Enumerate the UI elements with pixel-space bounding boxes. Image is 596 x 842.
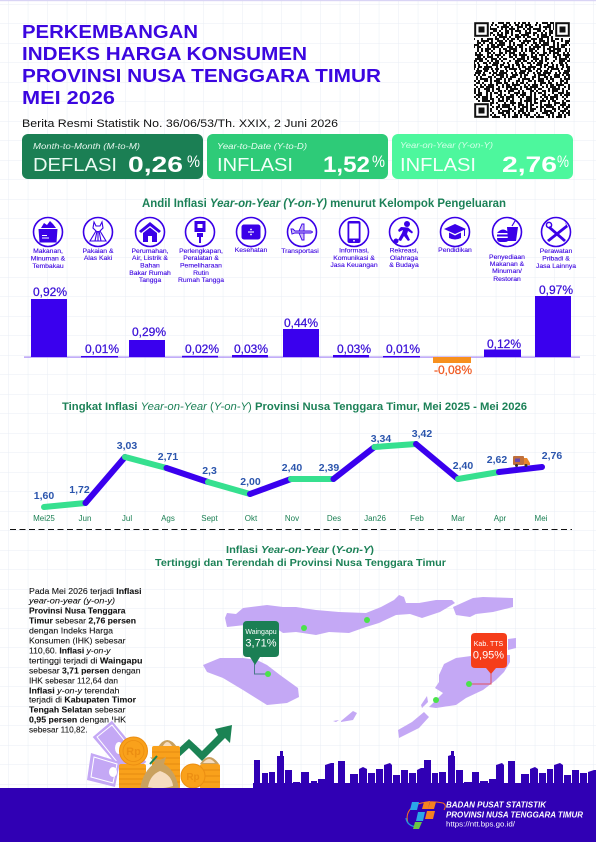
- category labels: Bakar Rumah: [129, 270, 171, 277]
- category labels: Penyediaan: [489, 254, 525, 261]
- card: month-to-month deflation: %: [187, 152, 200, 171]
- icon: education: [440, 218, 470, 246]
- text block: summary: 0,95 persen dengan IHK: [29, 714, 126, 724]
- card: year-on-year inflation: INFLASI: [400, 154, 476, 175]
- card: year-to-date inflation: 1,52: [323, 152, 370, 177]
- bar values: 0,03%: [234, 342, 268, 356]
- category labels: Minuman &: [31, 255, 66, 262]
- text block: summary: tertinggi terjadi di Waingapu: [29, 656, 142, 666]
- callout: Kab. TTS lowest: [469, 633, 507, 684]
- illustration: money, coins and rising arrow: [87, 720, 232, 789]
- bar values: 0,01%: [386, 342, 420, 356]
- line values: 2,76: [542, 450, 562, 462]
- category labels: [31, 247, 576, 284]
- month axis labels: Nov: [285, 514, 299, 523]
- month axis labels: Mei25: [33, 514, 55, 523]
- category labels: Perlengkapan,: [179, 248, 223, 255]
- month axis labels: Jan26: [364, 514, 386, 523]
- line values: 3,42: [412, 428, 432, 440]
- card: year-to-date inflation: Year-to-Date (Y-to-D): [217, 142, 307, 151]
- footer text: agency name: PROVINSI NUSA TENGGARA TIMUR: [446, 810, 583, 820]
- heading: contribution chart: Andil Inflasi Year-on-Year (Y-on-Y) menurut Kelompok Pengeluaran: [142, 196, 506, 210]
- category labels: Komunikasi &: [333, 255, 375, 262]
- category labels: Transportasi: [281, 248, 319, 255]
- line values: 2,00: [240, 476, 261, 488]
- bar values: 0,44%: [284, 316, 318, 330]
- text block: summary: dengan Indeks Harga: [29, 626, 113, 636]
- card: year-on-year inflation: [392, 134, 573, 179]
- month axis labels: [33, 514, 548, 523]
- icon: food service: [492, 218, 522, 246]
- line values: 2,62: [487, 454, 507, 466]
- callout: Waingapu highest: 3,71%: [245, 638, 277, 650]
- text block: summary: Timur sebesar 2,76 persen: [29, 616, 136, 626]
- text block: summary: Konsumen (IHK) sebesar: [29, 636, 126, 646]
- category labels: Air, Listrik &: [132, 255, 168, 262]
- icon: housing: [136, 218, 164, 246]
- card: year-on-year inflation: 2,76: [502, 152, 557, 177]
- card: year-to-date inflation: [207, 134, 388, 179]
- category labels: Jasa Keuangan: [330, 262, 378, 269]
- icon: recreation: [390, 218, 418, 246]
- category labels: Olahraga: [390, 255, 418, 262]
- line values: 2,40: [282, 462, 302, 474]
- icon: household equipment: [186, 218, 214, 246]
- category labels: Kesehatan: [235, 247, 267, 254]
- QR code: [474, 22, 570, 118]
- illustration: money, coins and rising arrow: Rp: [126, 746, 141, 758]
- category labels: Alas Kaki: [84, 255, 113, 262]
- category labels: Pemeliharaan: [180, 262, 222, 270]
- footer text: agency name: https://ntt.bps.go.id/: [446, 820, 516, 828]
- category labels: Makanan &: [490, 261, 525, 268]
- month axis labels: Sept: [201, 514, 218, 523]
- category labels: Peralatan &: [183, 255, 219, 262]
- line values: 1,72: [69, 484, 90, 496]
- icon: health: [236, 218, 266, 246]
- card: month-to-month deflation: DEFLASI: [33, 154, 117, 175]
- category labels: Jasa Lainnya: [536, 263, 576, 270]
- month axis labels: Feb: [410, 514, 424, 523]
- text block: summary: Provinsi Nusa Tenggara: [29, 606, 126, 616]
- bar values: 0,29%: [132, 325, 166, 339]
- month axis labels: Ags: [161, 514, 175, 523]
- category labels: Tangga: [139, 277, 161, 284]
- month axis labels: Apr: [494, 514, 507, 523]
- text block: summary: sebesar 110,82.: [29, 724, 88, 734]
- line values: 2,40: [453, 460, 473, 472]
- heading: highest and lowest inflation map: Tertinggi dan Terendah di Provinsi Nusa Tenggara Timur: [155, 557, 446, 569]
- category labels: Pribadi &: [542, 255, 570, 262]
- line values: 2,3: [202, 465, 217, 477]
- bar values: [33, 283, 573, 377]
- category labels: Makanan,: [33, 248, 63, 255]
- icon: delivery truck: [513, 456, 530, 467]
- category labels: Rekreasi,: [390, 248, 418, 254]
- text block: summary: 110,60. Inflasi y-on-y: [29, 646, 111, 656]
- bar chart: contribution by expenditure group: [24, 283, 580, 377]
- heading: line chart: Tingkat Inflasi Year-on-Year (Y-on-Y) Provinsi Nusa Tenggara Timur, Mei 2025 - Mei 2026: [62, 401, 527, 413]
- illustration: money, coins and rising arrow: Rp: [186, 772, 200, 783]
- category labels: Pendidikan: [438, 247, 472, 254]
- bar values: 0,12%: [487, 337, 521, 351]
- bar values: 0,03%: [337, 342, 371, 356]
- line values: 1,60: [34, 490, 54, 502]
- category labels: Minuman/: [492, 268, 522, 275]
- footer text: agency name: [446, 800, 583, 828]
- category labels: Pakaian &: [83, 248, 114, 255]
- title: INDEKS HARGA KONSUMEN: [22, 44, 307, 64]
- card: year-on-year inflation: Year-on-Year (Y-on-Y): [400, 141, 493, 150]
- category labels: Bahan: [140, 262, 160, 270]
- line values: [34, 428, 562, 502]
- line values: 2,39: [319, 462, 339, 474]
- text block: summary: Tengah Selatan sebesar: [29, 704, 126, 714]
- category labels: Rutin: [193, 270, 209, 277]
- card: year-on-year inflation: %: [557, 152, 569, 171]
- subtitle: release number: Berita Resmi Statistik No. 36/06/53/Th. XXIX, 2 Juni 2026: [22, 118, 338, 130]
- category labels: & Budaya: [389, 262, 419, 269]
- month axis labels: Des: [327, 514, 341, 523]
- month axis labels: Mar: [451, 514, 465, 523]
- category labels: Rumah Tangga: [178, 277, 224, 284]
- card: month-to-month deflation: [22, 134, 203, 179]
- text block: summary: Pada Mei 2026 terjadi Inflasi: [29, 586, 142, 596]
- line values: 3,03: [117, 440, 137, 452]
- bar values: -0,08%: [434, 363, 472, 377]
- month axis labels: Mei: [535, 514, 548, 523]
- card: month-to-month deflation: 0,26: [128, 152, 183, 177]
- icon: food and beverage: [34, 218, 62, 246]
- month axis labels: Jun: [79, 514, 91, 523]
- category labels: Informasi,: [339, 248, 369, 254]
- footer: skyline band: [0, 751, 596, 842]
- month axis labels: Jul: [122, 514, 132, 523]
- footer text: agency name: BADAN PUSAT STATISTIK: [446, 800, 547, 810]
- line chart: year-on-year inflation: [33, 428, 562, 523]
- card: month-to-month deflation: Month-to-Month (M-to-M): [33, 142, 140, 151]
- category labels: Perumahan,: [131, 248, 169, 255]
- icon: information and communication: [340, 218, 368, 246]
- heading: highest and lowest inflation map: [155, 544, 446, 569]
- title: [22, 22, 381, 108]
- month axis labels: Okt: [245, 514, 258, 523]
- text block: summary: IHK sebesar 112,64 dan: [29, 676, 118, 686]
- category labels: Perawatan: [540, 248, 572, 255]
- card: year-to-date inflation: %: [372, 152, 385, 171]
- icon: transportation: [288, 218, 316, 246]
- line values: 3,34: [371, 433, 391, 445]
- title: PERKEMBANGAN: [22, 22, 198, 42]
- heading: highest and lowest inflation map: Inflasi Year-on-Year (Y-on-Y): [226, 544, 374, 556]
- title: PROVINSI NUSA TENGGARA TIMUR: [22, 66, 381, 86]
- logo: BPS: [406, 801, 445, 829]
- icon: personal care: [542, 218, 570, 246]
- text block: summary: [28, 586, 143, 734]
- callout: Kab. TTS lowest: 0,95%: [473, 650, 504, 662]
- bar values: 0,97%: [539, 283, 573, 297]
- text block: summary: terjadi di Kabupaten Timor: [29, 694, 137, 704]
- bar values: 0,02%: [185, 342, 219, 356]
- map markers: [265, 617, 472, 703]
- category labels: Restoran: [493, 276, 521, 283]
- text block: summary: Inflasi y-on-y terendah: [29, 686, 120, 696]
- bar values: 0,01%: [85, 342, 119, 356]
- icon: clothing: [84, 218, 112, 246]
- text block: summary: sebesar 3,71 persen dengan: [29, 666, 141, 676]
- text block: summary: year-on-year (y-on-y): [28, 596, 115, 606]
- bar values: 0,92%: [33, 285, 67, 299]
- callout: Waingapu highest: [243, 621, 279, 674]
- callout: Waingapu highest: Waingapu: [245, 629, 277, 636]
- category labels: Tembakau: [32, 263, 64, 270]
- card: year-to-date inflation: INFLASI: [217, 154, 293, 175]
- map: Nusa Tenggara Timur islands: [203, 595, 516, 738]
- callout: Kab. TTS lowest: Kab. TTS: [474, 641, 504, 648]
- title: MEI 2026: [22, 88, 115, 108]
- line values: 2,71: [158, 451, 178, 463]
